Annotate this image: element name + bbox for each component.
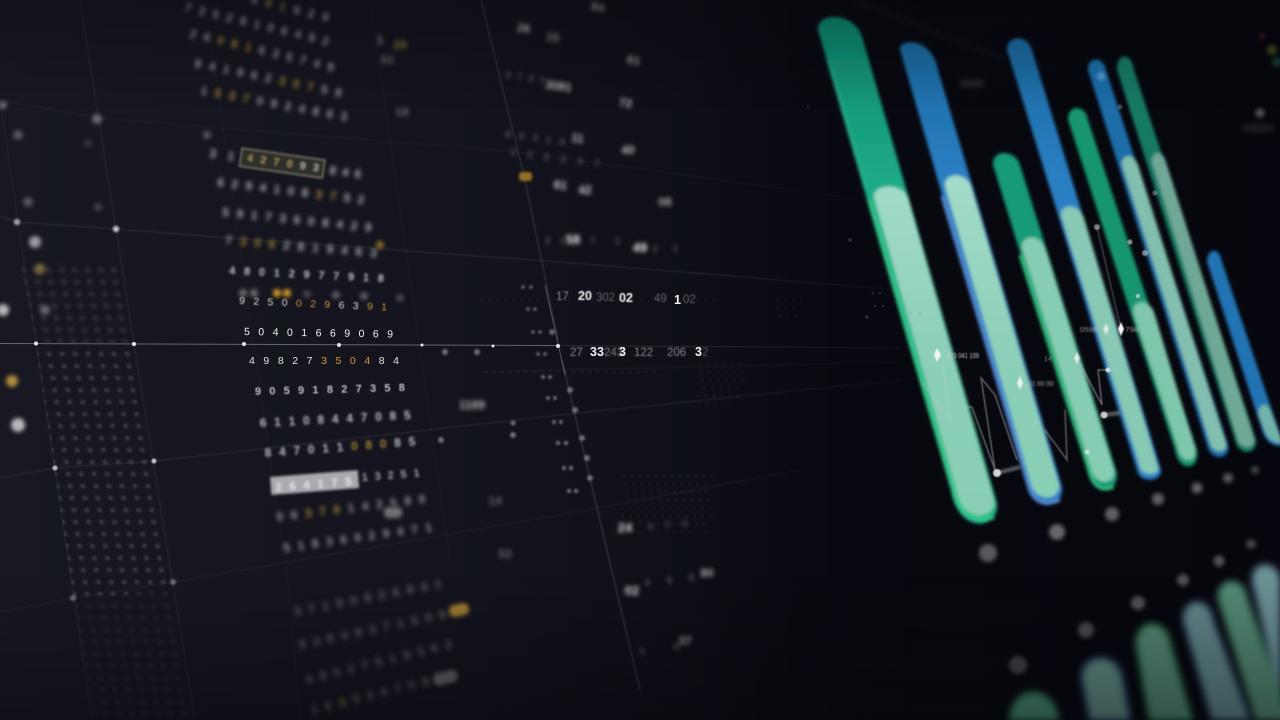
- data column: blurred bright values: 11: [570, 130, 585, 146]
- data column: blurred bright values: 37: [678, 634, 692, 648]
- faint dot blocks: [475, 292, 801, 532]
- bar 6: blue: [1088, 60, 1228, 457]
- bar 5: green: [1068, 108, 1197, 466]
- bar 2: blue: [900, 42, 1062, 505]
- tick markers under bars: [979, 108, 1276, 674]
- line chart overlay: 101 660 960: [1028, 381, 1054, 388]
- overlapping blob: [384, 507, 402, 518]
- bar 3: green: [993, 153, 1117, 490]
- number rows in focus: [239, 295, 399, 367]
- data column: focus numbers: 243: [604, 347, 623, 359]
- data column: dim values: [505, 70, 695, 658]
- data column: focus numbers: 3: [695, 345, 702, 359]
- number column: upper rows: 7 3 0 6 2 8 1 9 4 6 3: [225, 233, 378, 260]
- lower bar 5: [1218, 582, 1280, 720]
- data column: focus numbers: 2: [702, 347, 708, 359]
- data column: focus numbers: 17: [556, 291, 569, 303]
- data column: focus numbers: 1: [674, 293, 681, 307]
- data column: blurred bright values: 14: [488, 494, 502, 508]
- small dots left of bars: [807, 106, 921, 318]
- data column: dim values: 2 1: [652, 244, 678, 255]
- data column: focus numbers: 3: [619, 345, 626, 359]
- amber marker: [376, 241, 384, 249]
- line chart overlay: 0598: [1080, 327, 1097, 334]
- bar 4: blue: [1007, 38, 1161, 480]
- data column: focus numbers: 02: [683, 294, 696, 306]
- number rows in focus: 9 2 5 0 0 2 9 6 3 9 1: [239, 295, 387, 313]
- lower bar 6: [1252, 565, 1280, 720]
- number rows in focus: 5 0 4 0 1 6 6 9 0 6 9: [244, 326, 393, 341]
- number column: upper rows: 6 2 9 4 1 0 8 3 7 5 2: [217, 175, 366, 207]
- bar 1: green: [818, 17, 997, 524]
- text: 3 7 1 5 0 8 2 6 9 4 1: [293, 577, 443, 619]
- number column: top blurred rows: 1 5 3 7 0 9 2 4 8 6 3: [199, 83, 349, 124]
- line chart overlay: 14: [1044, 356, 1052, 363]
- large blurred markers: [0, 101, 211, 432]
- data column: focus numbers: [556, 289, 708, 359]
- data column: focus numbers: 302: [596, 292, 615, 304]
- data column: blurred bright values: 3081: [544, 77, 573, 95]
- data column: blurred bright values: 53: [498, 547, 512, 561]
- data column: dim values: 5 8: [639, 641, 680, 658]
- lower bar 4: [1183, 602, 1250, 720]
- number column: top blurred rows: [183, 0, 349, 124]
- grid node points: [14, 219, 560, 601]
- data column: blurred bright values: 49: [633, 240, 647, 255]
- number column: upper rows: 8 4 6: [329, 163, 363, 181]
- data column: blurred bright values: 08: [658, 195, 672, 209]
- data column: blurred bright values: 20: [393, 38, 407, 52]
- number column: top blurred rows: 8 4 1 9 6 2 3 0 7 5 8: [193, 56, 343, 100]
- number column: upper rows: [209, 146, 378, 260]
- data column: dim values: 8 6 3 1 4: [505, 129, 566, 148]
- data column: focus numbers: 27: [570, 347, 583, 359]
- text: 9 2 6 4 8 3 7 1 5 0 6: [298, 607, 448, 652]
- data column: blurred bright values: 61: [626, 52, 642, 68]
- lower bar 3: [1137, 625, 1192, 720]
- highlighted outlined number cell: 4 2 7 0 9 3: [247, 153, 320, 174]
- number rows below focus: 6 1 1 0 8 4 4 7 0 8 5: [259, 408, 411, 430]
- data column: focus numbers: 33: [590, 345, 604, 359]
- bar 8: blue: [1207, 251, 1280, 446]
- data column: blurred bright values: [377, 0, 714, 648]
- data column: focus numbers: 206: [667, 347, 686, 359]
- data column: focus numbers: 02: [619, 291, 633, 305]
- number column: top blurred rows: 2 6 0 8 1 6 3 5 7 4 9: [188, 26, 336, 75]
- lower bar 2: [1082, 658, 1130, 720]
- bar chart: main bars: [818, 17, 1280, 524]
- highlighted white number cell: 2 6 4 1 7 5: [275, 476, 352, 494]
- data column: dim values: 4 7 2: [647, 518, 689, 533]
- number rows in focus: 4 9 8 2 7 3 5 0 4 8 4: [249, 355, 399, 367]
- number column: lower rows: 0 6 3 7 9 1 4 2 5 8 0: [276, 492, 427, 524]
- amber tick: [519, 172, 532, 181]
- number rows below focus: 9 0 5 9 1 8 2 7 3 5 8: [255, 382, 405, 398]
- amber accent: [448, 602, 470, 618]
- number column: upper rows: 3 1: [209, 146, 236, 163]
- data column: blurred bright values: 61: [553, 177, 568, 193]
- line chart overlay: [920, 104, 1158, 477]
- data column: blurred bright values: 24: [618, 520, 633, 535]
- data column: blurred bright values: 02: [625, 583, 639, 598]
- vertical axis in focus: [545, 285, 565, 375]
- highlighted white number cell: 1 3 2 5 1: [361, 467, 420, 484]
- number column: lower rows: [276, 492, 433, 555]
- number rows below focus: 8 4 7 0 1 1 0 8 0 8 5: [264, 434, 416, 460]
- data column: dim values: 3 2 5 0 9 7: [510, 147, 601, 171]
- data column: focus numbers: 122: [634, 347, 653, 359]
- data column: blurred bright values: 1: [377, 33, 384, 47]
- data column: blurred bright values: 58: [566, 232, 580, 247]
- data column: blurred bright values: 40: [621, 143, 635, 157]
- data column: dim values: 4 6 0: [644, 573, 695, 589]
- corner colour accent: [1259, 33, 1280, 67]
- line chart overlay: 073 041 109: [947, 353, 979, 360]
- data column: blurred bright values: 26: [516, 20, 532, 36]
- data column: dim values: 0 7 4 1: [505, 70, 546, 87]
- data column: dim values: 2 1: [545, 236, 565, 247]
- dot cluster above focus row: [239, 289, 404, 302]
- lower blob: [432, 669, 458, 687]
- left dot matrix panel: [22, 267, 166, 606]
- highlighted outlined number cell: [239, 148, 325, 178]
- data column: focus numbers: 49: [654, 293, 667, 305]
- number rows below focus: [255, 382, 416, 460]
- number column: top blurred rows: 7 3 5 2 8 1 0 6 4 9 2: [183, 0, 331, 49]
- data column: blurred bright values: 1189: [459, 398, 485, 412]
- number column: upper rows: 5 9 1 7 3 6 0 8 4 2 9: [222, 205, 373, 235]
- dot column along axis: [438, 285, 593, 493]
- highlighted white number cell: [270, 467, 420, 495]
- data column: blurred bright values: 42: [578, 183, 592, 197]
- axis right extension: [558, 346, 900, 348]
- data column: blurred bright values: 18: [395, 105, 409, 119]
- grid lines: [0, 0, 900, 720]
- bar 7: green: [1117, 56, 1256, 452]
- text: 4 8 0 2 7 5 1 9 3 6 2: [304, 637, 454, 687]
- bar chart: lower row of blurred bars: [1010, 565, 1280, 720]
- text: 1 6 3 9 2 4 7 0 8 5 3: [309, 667, 459, 717]
- number rows above focus: 4 8 0 1 2 9 7 7 9 1 8: [229, 265, 384, 285]
- line chart overlay: 798: [1125, 327, 1139, 334]
- lower bar 1: [1010, 693, 1058, 720]
- data column: blurred bright values: 80: [700, 566, 714, 580]
- data column: blurred bright values: 50: [380, 53, 394, 67]
- faint top smear: [855, 0, 1005, 87]
- data column: blurred bright values: 72: [618, 95, 633, 111]
- data column: dim values: 7 1: [590, 236, 620, 247]
- data column: blurred bright values: 15: [545, 29, 561, 45]
- data column: focus numbers: 20: [578, 289, 592, 303]
- main horizontal axis: [0, 344, 558, 346]
- number column: lower rows: 5 1 8 3 6 0 2 9 4 7 1: [282, 520, 433, 555]
